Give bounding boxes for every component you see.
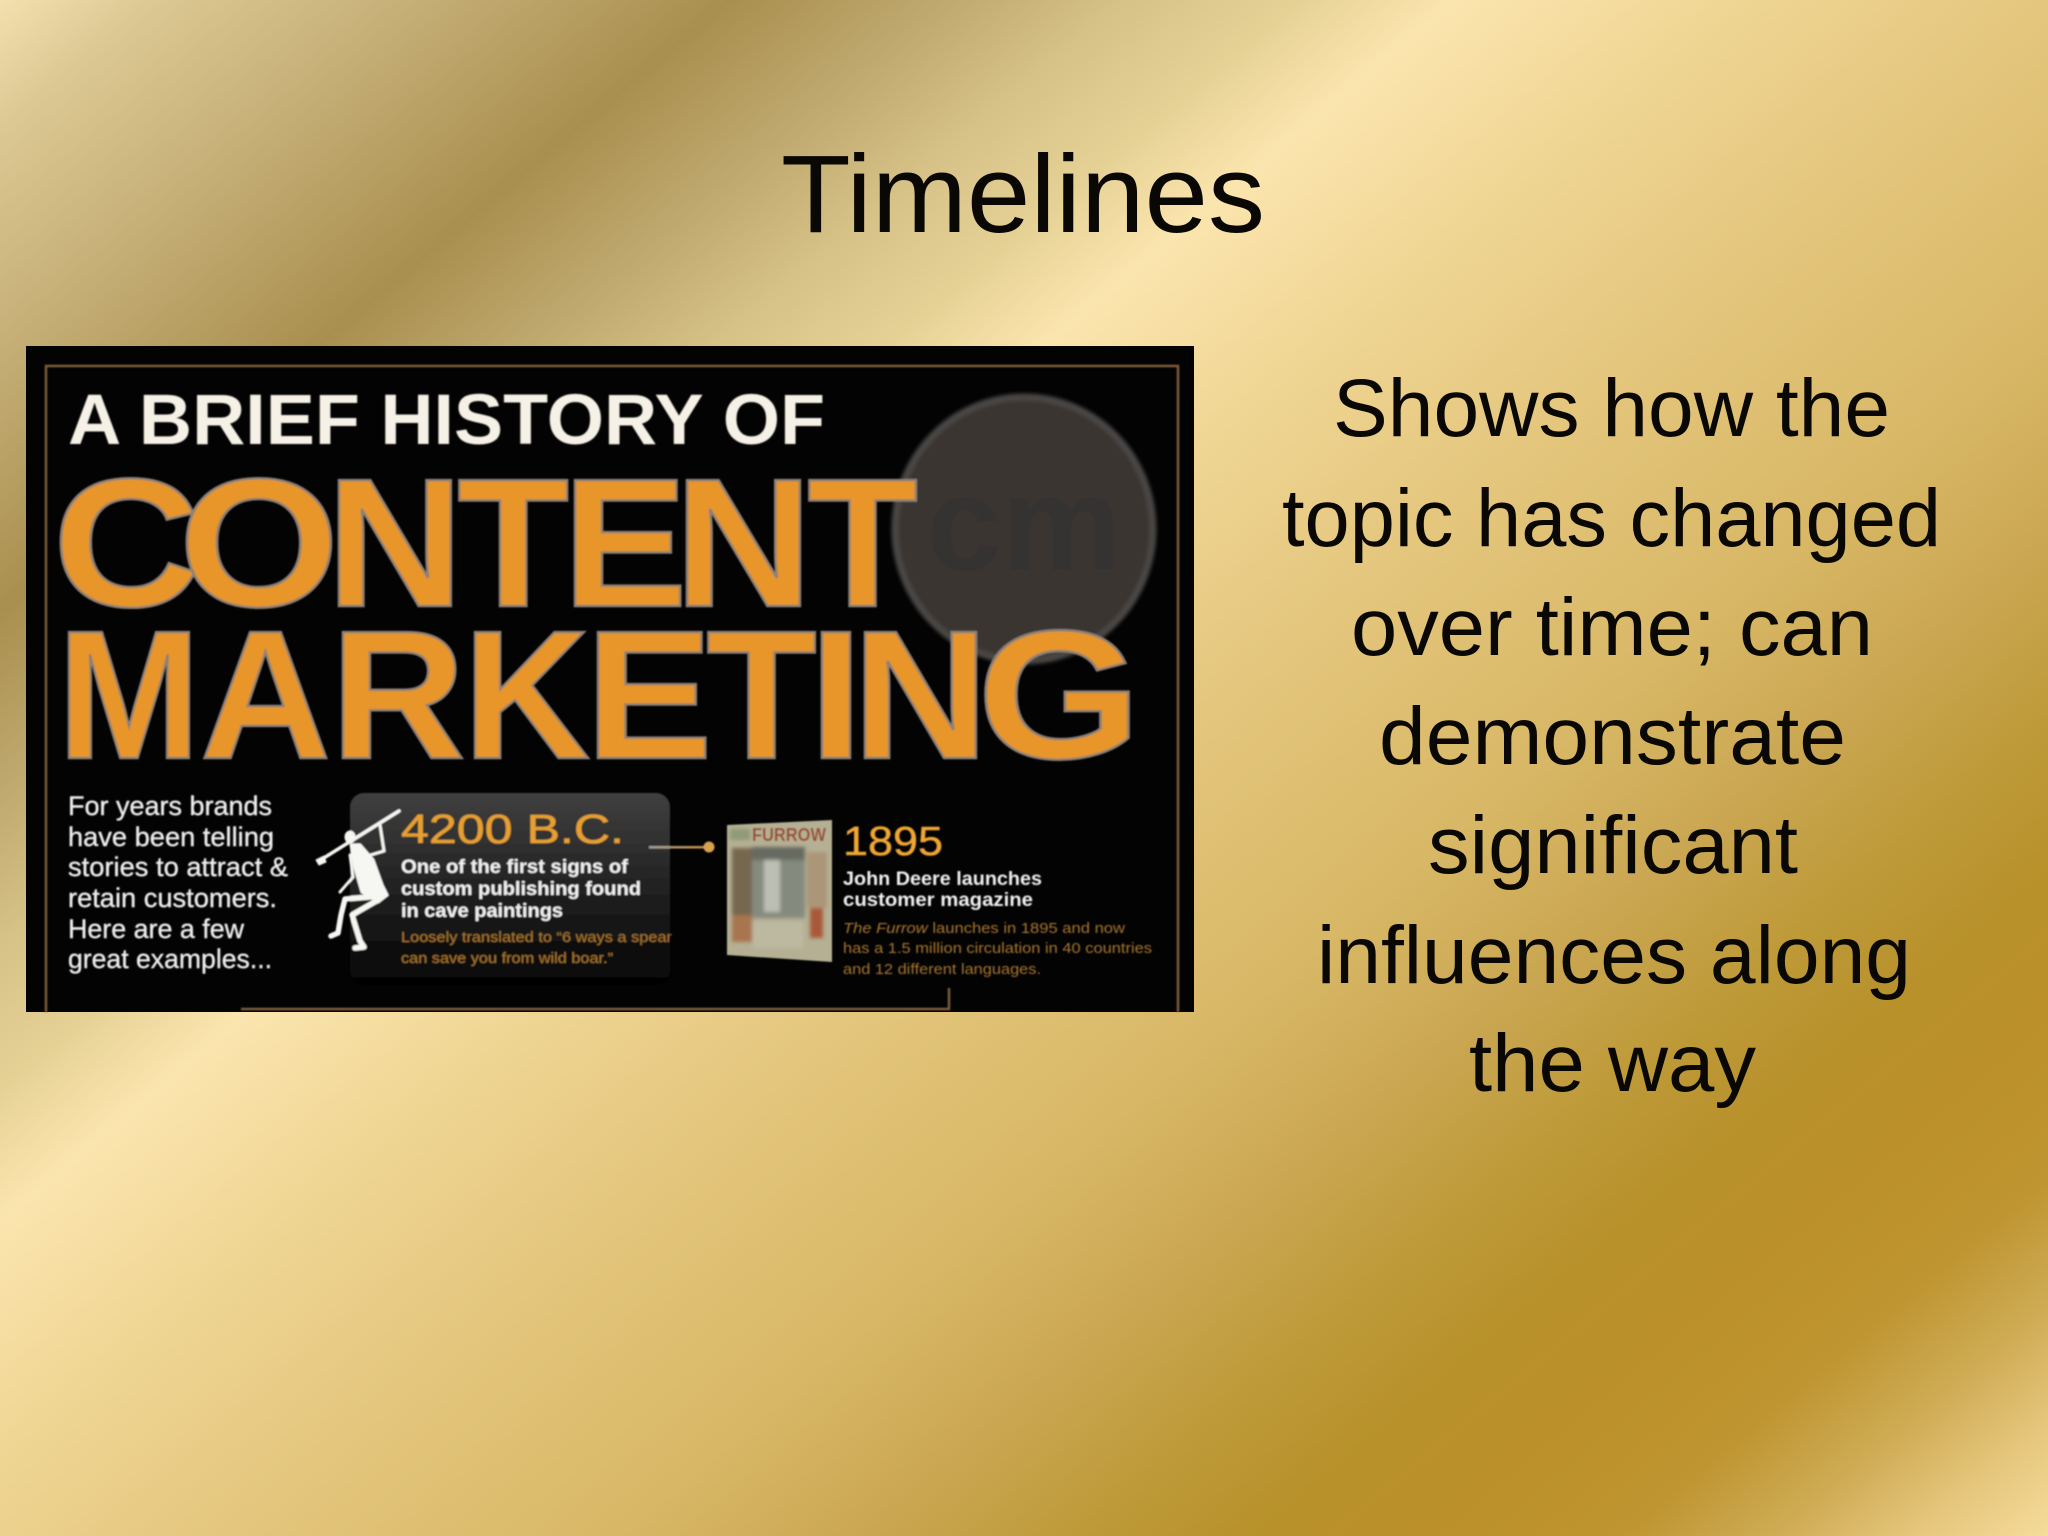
heading: content: N — [674, 440, 813, 645]
text block: intro: great examples... — [68, 944, 272, 974]
text block: description: Shows how the — [1333, 363, 1890, 454]
title: Timelines — [781, 133, 1265, 256]
text block: description: influences along — [1317, 910, 1911, 1001]
inner frame border — [46, 366, 1178, 1012]
heading: content: C — [53, 440, 200, 645]
4200 B.C. note — [401, 929, 672, 967]
4200 B.C. description: custom publishing found — [401, 879, 641, 900]
heading: content: T — [457, 440, 569, 645]
4200 B.C. description: One of the first signs of — [401, 857, 629, 878]
1895 description: customer magazine — [843, 890, 1033, 911]
1895 date: 1895 — [843, 818, 943, 864]
text block: description — [1282, 363, 1941, 1109]
text block: description: over time; can — [1351, 582, 1873, 673]
4200 B.C. note: can save you from wild boar.” — [401, 950, 613, 967]
icon: The Furrow magazine cover: FURROW — [752, 825, 826, 845]
icon: cm logo circle — [895, 397, 1153, 661]
heading: content: N — [326, 440, 464, 645]
4200 B.C. date: 4200 B.C. — [401, 806, 624, 852]
text block: intro: Here are a few — [68, 914, 245, 944]
heading: content: O — [178, 440, 340, 645]
heading: marketing: E — [585, 592, 713, 797]
heading: marketing: M — [58, 592, 200, 797]
text block: intro: For years brands — [68, 791, 272, 821]
text block: intro: retain customers. — [68, 883, 277, 913]
1895 description — [843, 869, 1042, 911]
icon: The Furrow magazine cover — [727, 820, 832, 962]
icon: cm logo circle: cm — [926, 448, 1122, 599]
1895 description: John Deere launches — [843, 869, 1042, 890]
heading: marketing: T — [706, 592, 817, 797]
text block: description: demonstrate — [1379, 691, 1846, 782]
heading: content: T — [807, 440, 918, 645]
1895 note: has a 1.5 million circulation in 40 countries — [843, 941, 1152, 957]
4200 B.C. note: Loosely translated to “6 ways a spear — [401, 929, 672, 946]
panel: 4200 B.C. card — [350, 793, 670, 985]
1895 note: and 12 different languages. — [843, 962, 1041, 978]
text block: description: significant — [1428, 800, 1798, 891]
heading: marketing: K — [463, 592, 590, 797]
heading: marketing: G — [977, 592, 1142, 797]
4200 B.C. description — [401, 857, 641, 922]
text block: description: topic has changed — [1282, 473, 1941, 564]
heading: marketing: A — [200, 592, 331, 797]
text block: intro: stories to attract & — [68, 852, 288, 882]
panel: embedded infographic image — [26, 346, 1194, 1012]
icon: cave painting figure with spear — [316, 811, 399, 948]
heading: marketing: N — [852, 592, 989, 797]
1895 note: The Furrow launches in 1895 and now — [843, 921, 1126, 937]
heading: marketing: I — [809, 592, 863, 797]
1895 note — [843, 921, 1152, 978]
text block: description: the way — [1469, 1018, 1756, 1109]
text block: intro: have been telling — [68, 822, 274, 852]
heading: content: E — [562, 440, 688, 645]
heading: a brief history of: A BRIEF HISTORY OF — [68, 381, 825, 460]
heading: marketing: R — [330, 592, 466, 797]
timeline connector arrow — [649, 842, 714, 852]
text block: intro — [68, 791, 288, 974]
4200 B.C. description: in cave paintings — [401, 901, 563, 922]
